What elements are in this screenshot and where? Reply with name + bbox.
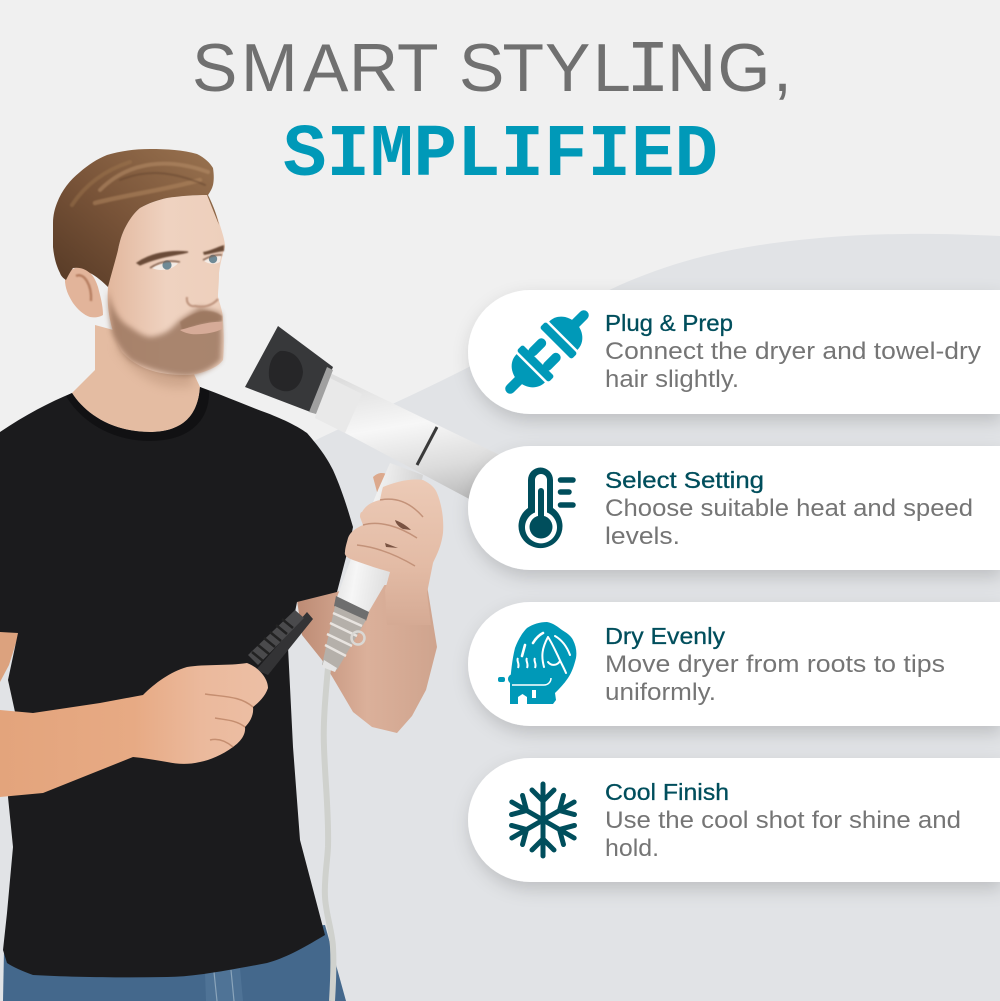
icon: snowflake <box>506 784 580 856</box>
step text <box>605 310 981 393</box>
title: NG, <box>667 30 792 106</box>
eyes <box>150 255 222 270</box>
step text: Cool Finish <box>605 779 729 805</box>
lips <box>180 322 222 334</box>
hair dryer nozzle <box>245 326 333 414</box>
step text <box>605 779 961 862</box>
icon: thermometer <box>518 467 573 548</box>
title: I <box>626 30 670 114</box>
knuckle lines <box>205 694 253 747</box>
hair dryer handle <box>322 463 423 672</box>
left forearm and fist <box>0 663 268 797</box>
skin behind dryer handle <box>373 473 388 495</box>
jeans <box>3 925 346 1001</box>
title: SMART STYL <box>192 30 631 106</box>
step text: levels. <box>605 523 680 550</box>
hair dryer barrel <box>315 373 510 510</box>
title <box>192 30 792 198</box>
man holding hair dryer and comb <box>0 149 510 1001</box>
step text: Connect the dryer and towel-dry <box>605 338 981 365</box>
step text: Use the cool shot for shine and <box>605 807 961 834</box>
step text <box>605 623 945 706</box>
t-shirt <box>0 387 353 977</box>
step text: uniformly. <box>605 679 716 706</box>
hair <box>53 149 219 287</box>
shirt collar <box>66 387 209 441</box>
face <box>108 195 225 375</box>
eyebrows <box>137 245 224 265</box>
finger lines <box>357 499 423 566</box>
step text: Choose suitable heat and speed <box>605 495 973 522</box>
mustache <box>180 311 222 330</box>
neck <box>72 325 200 432</box>
upper left arm <box>0 630 20 682</box>
gaps between fingers <box>385 520 411 548</box>
icon: hair drying <box>498 622 576 704</box>
ear <box>65 267 103 317</box>
beard <box>108 290 222 376</box>
card: Plug & Prep <box>468 290 1000 414</box>
right upper arm and forearm <box>297 585 437 733</box>
neck stubble <box>115 345 195 388</box>
step text: Dry Evenly <box>605 623 726 649</box>
card: Cool Finish <box>468 758 1000 882</box>
hair strands <box>72 162 208 205</box>
dryer cord <box>324 668 333 1001</box>
step text <box>605 467 973 550</box>
step text: hold. <box>605 835 659 862</box>
comb <box>248 610 313 675</box>
right hand gripping handle <box>345 479 443 625</box>
card: Select Setting <box>468 446 1000 570</box>
icon: plug <box>491 296 603 408</box>
step text: Plug & Prep <box>605 310 733 336</box>
nose <box>187 297 218 307</box>
step text: Move dryer from roots to tips <box>605 651 945 678</box>
title: SIMPLIFIED <box>283 114 718 198</box>
step text: Select Setting <box>605 467 764 493</box>
card: Dry Evenly <box>468 602 1000 726</box>
step text: hair slightly. <box>605 366 739 393</box>
